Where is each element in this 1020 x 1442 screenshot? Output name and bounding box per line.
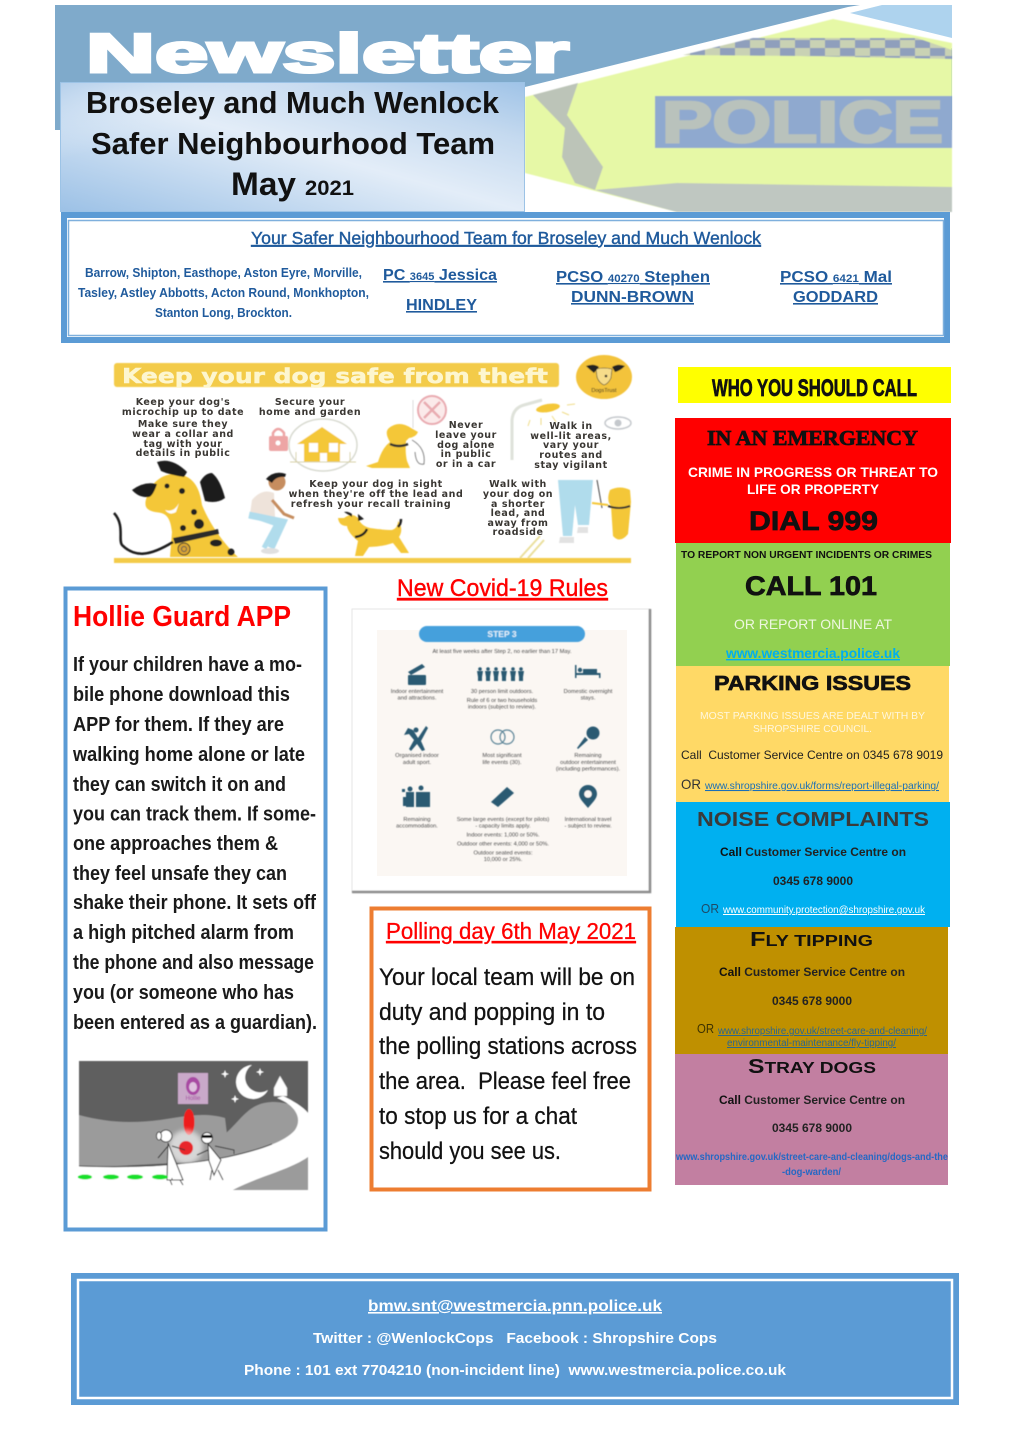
panel: team contacts <box>64 215 947 340</box>
panel: fly tipping: environmental-maintenance/fly-tipping/ <box>727 1038 896 1049</box>
panel: stray dogs: 0345 678 9000 <box>772 1121 852 1135</box>
rule captions: International travel <box>565 817 611 823</box>
panel: parking issues: OR <box>681 776 701 792</box>
rule captions: and attractions. <box>398 696 437 702</box>
rule captions: (including performances). <box>556 766 621 772</box>
panel: emergency: DIAL 999 <box>749 506 878 536</box>
panel: polling day <box>372 908 650 1190</box>
dog safety tips <box>122 397 612 538</box>
header banner: police photo <box>55 5 952 212</box>
dog safety tips: well-lit areas, <box>530 431 612 442</box>
dog poster title: Keep your dog safe from theft <box>122 364 549 388</box>
panel: emergency: LIFE OR PROPERTY <box>747 481 880 497</box>
title panel: Safer Neighbourhood Team <box>91 126 495 161</box>
icon: Dogs Trust logo: DogsTrust <box>591 388 617 394</box>
panel: noise complaints: 0345 678 9000 <box>773 874 853 888</box>
step pill: STEP 3 <box>487 629 517 639</box>
dog safety tips: refresh your recall training <box>291 499 451 510</box>
rule captions: Organised indoor <box>395 753 439 759</box>
dog safety tips: home and garden <box>259 407 361 418</box>
panel: emergency: IN AN EMERGENCY <box>707 426 918 450</box>
polling text <box>379 964 637 1165</box>
dog safety tips: Never <box>449 420 483 431</box>
body text: one approaches them & <box>73 833 278 855</box>
dog safety tips: lead, and <box>491 508 545 519</box>
officers: PCSO 6421 Mal <box>780 269 892 286</box>
rule captions: Some large events (except for pilots) <box>457 817 549 823</box>
footer contact panel: Phone : 101 ext 7704210 (non-incident line) www.westmercia.police.co.uk <box>244 1363 787 1379</box>
polling text: the area. Please feel free <box>379 1068 631 1095</box>
dog safety tips: wear a collar and <box>132 429 234 440</box>
panel: non urgent: CALL 101 <box>745 571 877 601</box>
panel: parking issues: www.shropshire.gov.uk/forms/report-illegal-parking/ <box>704 780 939 792</box>
panel: fly tipping <box>675 927 948 1054</box>
title panel: Broseley and Much Wenlock <box>86 85 500 120</box>
figures <box>156 1130 234 1185</box>
heading: Hollie Guard APP <box>73 601 291 633</box>
panel: stray dogs <box>675 1054 948 1185</box>
panel: parking issues <box>676 666 949 802</box>
illustration: sitting dog with no sign <box>366 396 446 468</box>
title panel: May <box>231 166 296 202</box>
panel: parking issues: SHROPSHIRE COUNCIL. <box>753 723 872 735</box>
body text: a high pitched alarm from <box>73 922 294 944</box>
body text: APP for them. If they are <box>73 714 284 736</box>
dog safety tips: Secure your <box>275 397 345 408</box>
officers: GODDARD <box>793 289 878 306</box>
panel: non urgent <box>676 543 950 666</box>
footer contact panel: Twitter : @WenlockCops Facebook : Shropshire Cops <box>313 1331 717 1347</box>
panel: noise complaints: OR <box>701 901 719 916</box>
panel: Step 3 covid rules image <box>352 609 650 892</box>
polling text: the polling stations across <box>379 1033 637 1060</box>
rule captions: 10,000 or 25%. <box>484 857 523 863</box>
illustration: running dog <box>338 512 409 556</box>
body text: bile phone download this <box>73 684 290 706</box>
rule icons <box>402 664 600 808</box>
heading: who you should call: WHO YOU SHOULD CALL <box>712 375 917 402</box>
body text <box>72 654 317 1034</box>
illustration: dalmatian <box>114 461 238 557</box>
panel: noise complaints <box>676 802 950 927</box>
dog safety tips: vary your <box>543 440 599 451</box>
dog safety tips: Make sure they <box>138 419 228 430</box>
dog safety tips: routes and <box>539 450 603 461</box>
polling text: to stop us for a chat <box>379 1103 577 1130</box>
dog safety tips: dog alone <box>437 440 495 451</box>
rule captions: accommodation. <box>396 824 438 830</box>
panel: noise complaints: www.community.protection@shropshire.gov.uk <box>722 905 926 916</box>
panel: non urgent: TO REPORT NON URGENT INCIDENTS OR CRIMES <box>681 549 932 561</box>
rule captions: Domestic overnight <box>564 689 613 695</box>
panel: Hollie Guard APP <box>66 588 326 1230</box>
icon: Dogs Trust logo <box>576 355 632 399</box>
rule captions: adult sport. <box>403 760 431 766</box>
rule captions: Indoor events: 1,000 or 50%. <box>466 832 540 838</box>
panel: Step 3 covid rules image: At least five weeks after Step 2, no earlier than 17 May. <box>432 649 572 655</box>
officers <box>383 267 892 314</box>
heading: New Covid-19 Rules: New Covid-19 Rules <box>397 575 608 602</box>
body text: shake their phone. It sets off <box>73 892 316 914</box>
rule captions: Outdoor seated events: <box>473 850 533 856</box>
rule captions: Indoor entertainment <box>391 689 444 695</box>
illustration: person crouching <box>249 473 294 554</box>
panel: noise complaints: Call Customer Service Centre on <box>720 845 906 859</box>
dog safety tips: a shorter <box>491 499 545 510</box>
header banner: police photo: POLICE <box>662 90 943 155</box>
body text: they can switch it on and <box>73 774 286 796</box>
dog safety tips: roadside <box>493 527 543 538</box>
areas covered: Barrow, Shipton, Easthope, Aston Eyre, Morville, <box>85 266 362 280</box>
areas covered: Stanton Long, Brockton. <box>155 306 292 320</box>
illustration: street lamp and eye <box>512 400 631 460</box>
panel: parking issues: PARKING ISSUES <box>714 672 911 695</box>
dog safety tips: microchip up to date <box>122 407 244 418</box>
dog safety tips: or in a car <box>436 459 496 470</box>
panel: parking issues: Call Customer Service Centre on 0345 678 9019 <box>681 748 943 762</box>
heading: who you should call <box>678 367 951 403</box>
panel: emergency <box>675 418 951 543</box>
rule captions: Rule of 6 or two households <box>467 698 537 704</box>
illustration: night street alarm scene: Hollie <box>185 1096 201 1102</box>
panel: stray dogs: -dog-warden/ <box>782 1166 841 1178</box>
body text: been entered as a guardian). <box>73 1012 317 1034</box>
body text: you (or someone who has <box>73 982 294 1004</box>
rule captions: Remaining <box>403 817 431 823</box>
panel: non urgent: OR REPORT ONLINE AT <box>734 616 892 632</box>
polling text: Your local team will be on <box>379 964 635 991</box>
dog safety tips: details in public <box>136 448 230 459</box>
officers: DUNN-BROWN <box>571 289 694 306</box>
panel: emergency: CRIME IN PROGRESS OR THREAT TO <box>688 464 938 480</box>
panel: stray dogs: Call Customer Service Centre on <box>719 1093 905 1107</box>
footer contact panel <box>71 1273 959 1405</box>
body text: the phone and also message <box>73 952 314 974</box>
body text: walking home alone or late <box>72 744 305 766</box>
areas covered: Tasley, Astley Abbotts, Acton Round, Monkhopton, <box>78 286 369 300</box>
dog safety tips: stay vigilant <box>534 460 608 471</box>
panel: non urgent: www.westmercia.police.uk <box>725 645 900 661</box>
rule captions: Most significant <box>482 753 522 759</box>
panel: fly tipping: 0345 678 9000 <box>772 994 852 1008</box>
panel: stray dogs: STRAY DOGS <box>748 1056 876 1078</box>
panel: parking issues: MOST PARKING ISSUES ARE DEALT WITH BY <box>700 710 925 722</box>
body text: they feel unsafe they can <box>73 863 287 885</box>
panel: fly tipping: Call Customer Service Centre on <box>719 965 905 979</box>
polling heading: Polling day 6th May 2021 <box>386 918 636 944</box>
officers: HINDLEY <box>406 297 477 314</box>
rule captions: life events (30). <box>483 760 522 766</box>
panel: stray dogs: www.shropshire.gov.uk/street-care-and-cleaning/dogs-and-the <box>675 1151 948 1163</box>
officers: PC 3645 Jessica <box>383 267 497 284</box>
footer contact panel: bmw.snt@westmercia.pnn.police.uk <box>368 1298 662 1315</box>
body text: you can track them. If some- <box>73 804 316 826</box>
dog safety tips: away from <box>488 518 548 529</box>
dog safety tips: leave your <box>435 430 497 441</box>
rule captions: Remaining <box>574 753 602 759</box>
masthead word: Newsletter: Newsletter <box>86 22 569 84</box>
dog safety tips: Keep your dog in sight <box>309 479 443 490</box>
rule captions <box>391 689 621 863</box>
areas covered <box>78 266 369 320</box>
rule captions: - subject to review. <box>564 824 612 830</box>
dog safety tips: Walk with <box>489 479 547 490</box>
panel: fly tipping: FLY TIPPING <box>750 929 873 951</box>
polling text: duty and popping in to <box>379 999 605 1026</box>
rule captions: - capacity limits apply. <box>475 824 531 830</box>
rule captions: outdoor entertainment <box>560 760 616 766</box>
rule captions: indoors (subject to review). <box>468 704 536 710</box>
illustration: secure home <box>269 419 357 471</box>
dog safety tips: your dog on <box>483 489 553 500</box>
body text: If your children have a mo- <box>73 654 302 676</box>
rule captions: 30 person limit outdoors. <box>471 689 534 695</box>
officers: PCSO 40270 Stephen <box>556 269 710 286</box>
panel: fly tipping: OR <box>697 1021 714 1036</box>
polling text: should you see us. <box>379 1138 561 1165</box>
dog safety tips: Keep your dog's <box>136 397 230 408</box>
title panel <box>60 82 524 212</box>
team heading: Your Safer Neighbourhood Team for Broseley and Much Wenlock <box>251 228 761 248</box>
dog safety tips: tag with your <box>143 439 223 450</box>
illustration: legs and leashed dog <box>520 480 631 558</box>
dog safety tips: Walk in <box>549 421 593 432</box>
panel: noise complaints: NOISE COMPLAINTS <box>697 808 929 831</box>
step pill <box>419 626 585 642</box>
panel: dog theft infographic <box>114 355 632 563</box>
title panel: 2021 <box>305 177 354 200</box>
rule captions: Outdoor other events: 4,000 or 50%. <box>457 842 549 848</box>
panel: fly tipping: www.shropshire.gov.uk/street-care-and-cleaning/ <box>717 1026 927 1037</box>
illustration: night street alarm scene <box>78 1061 308 1190</box>
rule captions: stays. <box>581 696 596 702</box>
dog safety tips: in public <box>441 449 491 460</box>
dog safety tips: when they're off the lead and <box>289 489 463 500</box>
